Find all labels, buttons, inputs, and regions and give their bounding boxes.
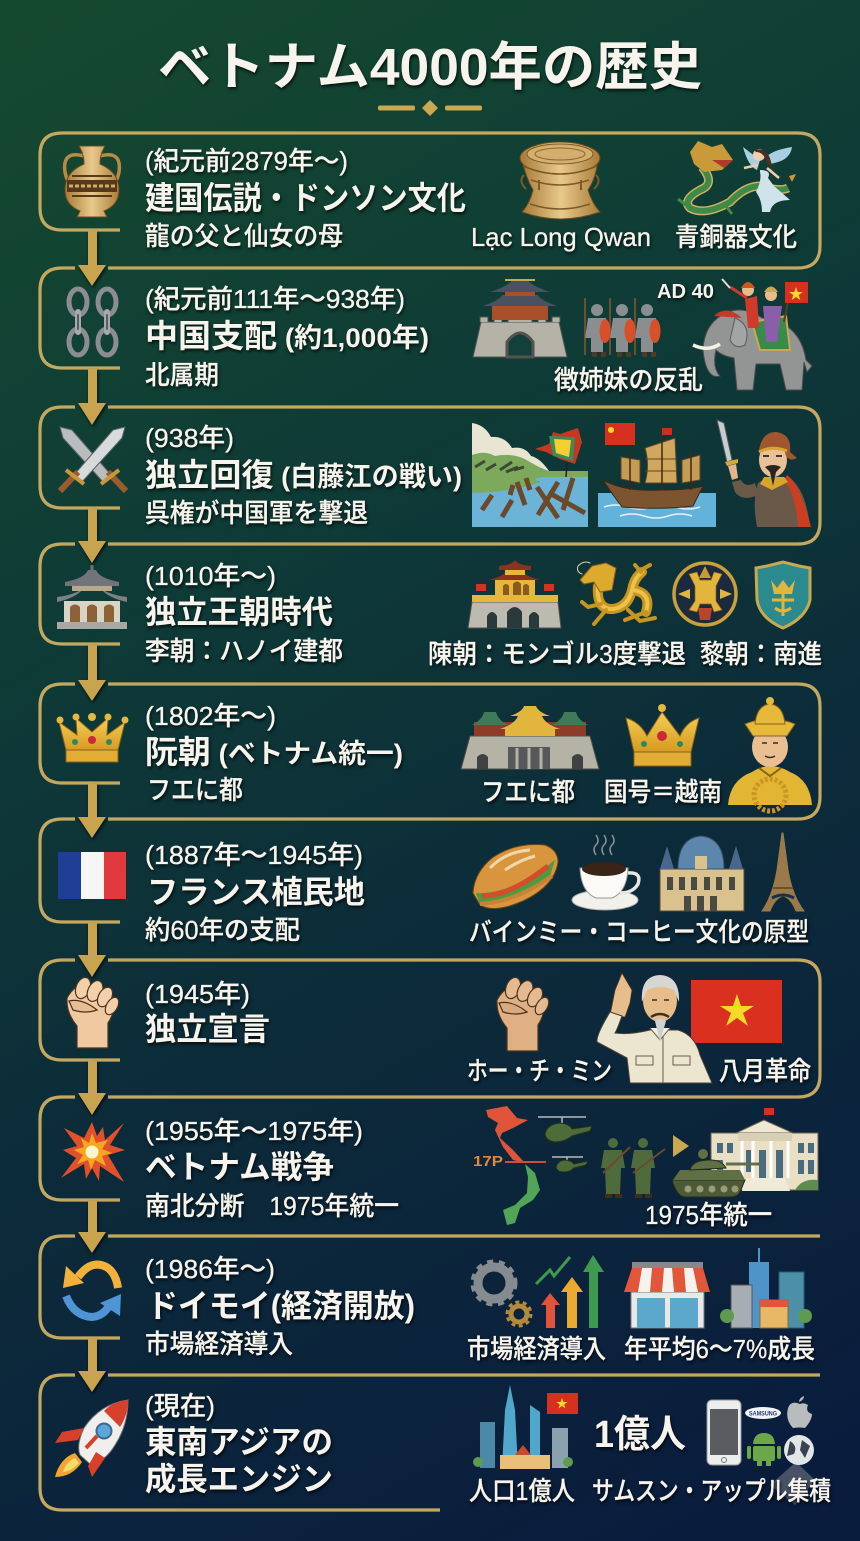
arrow: step 4 to 5 (78, 645, 106, 701)
icon: shop (624, 1262, 710, 1328)
arrow: step 3 to 4 (78, 509, 106, 563)
icon: refresh arrows (63, 1265, 121, 1317)
text: date: (1986年〜) (145, 1254, 275, 1284)
icon: explosion (61, 1122, 125, 1182)
title ornament (378, 100, 482, 116)
icon: smartphone (707, 1400, 741, 1465)
icon: dragon and fairy (678, 141, 796, 214)
text: date: (1945年) (145, 979, 250, 1009)
text: subtitle: 龍の父と仙女の母 (145, 221, 343, 251)
text: caption market economy: 市場経済導入 (467, 1334, 606, 1364)
icon: Android logo (747, 1433, 781, 1466)
icon: growth arrows (536, 1255, 604, 1328)
text: caption banh mi and coffee: バインミー・コーヒー文化の原型 (469, 917, 809, 947)
icon: three soldiers (585, 298, 660, 357)
panel: French colony (40, 819, 809, 947)
text: date: (1802年〜) (145, 701, 276, 731)
icon: raised fist large (497, 975, 552, 1051)
text: caption reunification: 1975年統一 (645, 1200, 772, 1230)
text: heading: 独立回復 (白藤江の戦い) (145, 457, 462, 493)
panel: founding legend and Dong Son culture (40, 133, 820, 268)
text: date: (紀元前2879年〜) (145, 146, 348, 176)
icon: French colonial building (660, 836, 744, 911)
arrow: to reunification (673, 1135, 689, 1157)
illustration: Ngo Quyen general with sword (717, 420, 811, 527)
icon: Samsung logo: SAMSUNG (749, 1412, 777, 1418)
arrow: step 9 to 10 (78, 1339, 106, 1392)
illustration: Ho Chi Minh waving (597, 973, 712, 1083)
text: date: (1887年〜1945年) (145, 840, 363, 870)
panel: present day (40, 1375, 831, 1510)
icon: bronze vase (65, 146, 119, 217)
icon: Tran dynasty emblem (674, 563, 736, 625)
icon: Eiffel tower (762, 833, 804, 911)
icon: crown (56, 713, 128, 762)
text: caption August Revolution: 八月革命 (719, 1056, 811, 1086)
arrow: step 1 to 2 (78, 231, 106, 286)
icon: broken chains (69, 289, 116, 355)
text: caption Hue capital: フエに都 (481, 777, 575, 807)
panel: Nguyen dynasty (40, 684, 820, 819)
icon: large crown (626, 704, 699, 766)
icon: city skyscrapers (720, 1248, 812, 1328)
text: subtitle: 南北分断 1975年統一 (145, 1191, 399, 1221)
panel: Doi Moi (40, 1236, 820, 1364)
icon: Ly citadel (468, 560, 561, 628)
icon: Chinese fortress gate (473, 280, 567, 357)
text: heading: ベトナム戦争 (145, 1149, 334, 1185)
icon: Hue imperial palace (461, 706, 599, 769)
icon: Samsung logo (745, 1407, 781, 1419)
text: AD 40: AD 40 (657, 281, 714, 303)
title: ベトナム4000年の歴史 (158, 39, 702, 97)
text: heading: 阮朝 (ベトナム統一) (145, 734, 403, 770)
icon: tank (672, 1149, 760, 1197)
icon: Apple logo (787, 1396, 812, 1428)
illustration: Bach Dang river stakes (472, 423, 588, 527)
icon: Nguyen emperor (728, 697, 812, 811)
text: heading: フランス植民地 (147, 874, 365, 910)
icon: bronze drum (520, 142, 600, 219)
text: heading: 独立王朝時代 (145, 594, 333, 630)
icon: Vietnamese flag (691, 980, 782, 1043)
icon: golden dragon (578, 562, 655, 624)
text: heading line 2: 成長エンジン (145, 1461, 333, 1497)
panel: Chinese rule (40, 268, 812, 395)
text: date: (1955年〜1975年) (145, 1116, 363, 1146)
text: caption Lac Long Quan: Lạc Long Qwan (471, 222, 651, 252)
panel: declaration of independence (40, 960, 820, 1097)
icon: coffee cup (572, 835, 639, 910)
text: heading: 建国伝説・ドンソン文化 (145, 180, 466, 216)
text: 100 million: 1億人 (594, 1414, 686, 1456)
icon: Le dynasty shield (756, 562, 810, 628)
text: subtitle: 李朝：ハノイ建都 (145, 636, 343, 666)
text: caption Le dynasty: 黎朝：南進 (700, 639, 822, 669)
text: caption population: 人口1億人 (469, 1476, 575, 1506)
icon: pagoda (57, 565, 127, 629)
text: subtitle: 約60年の支配 (145, 915, 300, 945)
icon: helicopter small (552, 1157, 588, 1172)
panel: independent dynasties (40, 544, 822, 669)
icon: crossed swords (60, 427, 126, 491)
text: heading: 中国支配 (約1,000年) (145, 318, 429, 354)
icon: gears (473, 1262, 531, 1326)
text: caption country name: 国号＝越南 (604, 777, 722, 807)
text: 17th parallel label: 17P (473, 1153, 503, 1170)
panel: Vietnam War (40, 1097, 818, 1230)
text: caption annual growth: 年平均6〜7%成長 (624, 1334, 815, 1364)
text: caption bronze culture: 青銅器文化 (675, 222, 797, 252)
text: caption Trung sisters revolt: 徴姉妹の反乱 (554, 365, 703, 395)
line: 17th parallel (505, 1161, 546, 1163)
map: divided Vietnam (486, 1106, 540, 1225)
text: date: (現在) (145, 1391, 215, 1421)
arrow: step 8 to 9 (78, 1201, 106, 1253)
icon: globe and silhouette (770, 1435, 815, 1505)
text: subtitle: 北属期 (145, 360, 219, 390)
icon: raised fist (67, 975, 122, 1048)
arrow: step 6 to 7 (78, 923, 106, 977)
illustration: Chinese junk ship (598, 423, 716, 527)
icon: helicopter large (538, 1117, 592, 1142)
panel: independence regained (40, 407, 820, 544)
text: heading line 1: 東南アジアの (145, 1424, 333, 1460)
text: caption Ho Chi Minh: ホー・チ・ミン (467, 1056, 612, 1086)
text: date: (1010年〜) (145, 561, 276, 591)
arrow: step 5 to 6 (78, 784, 106, 838)
text: subtitle: フエに都 (147, 775, 243, 805)
text: date: (938年) (145, 423, 234, 453)
text: subtitle: 市場経済導入 (145, 1329, 293, 1359)
icon: banh mi (473, 845, 558, 909)
text: heading: ドイモイ(経済開放) (147, 1288, 415, 1324)
text: subtitle: 呉権が中国軍を撃退 (145, 498, 368, 528)
text: date: (紀元前111年〜938年) (145, 284, 405, 314)
arrow: step 2 to 3 (78, 369, 106, 425)
icon: Trung sisters on elephant with flag (693, 279, 812, 390)
arrow: step 7 to 8 (78, 1061, 106, 1115)
text: heading: 独立宣言 (145, 1011, 270, 1047)
icon: modern city with flag (473, 1385, 578, 1469)
icon: soldiers with rifles (601, 1138, 665, 1198)
icon: rocket (55, 1400, 128, 1477)
icon: French flag (58, 852, 126, 899)
icon: presidential palace (711, 1108, 818, 1191)
text: caption Tran dynasty: 陳朝：モンゴル3度撃退 (428, 639, 686, 669)
